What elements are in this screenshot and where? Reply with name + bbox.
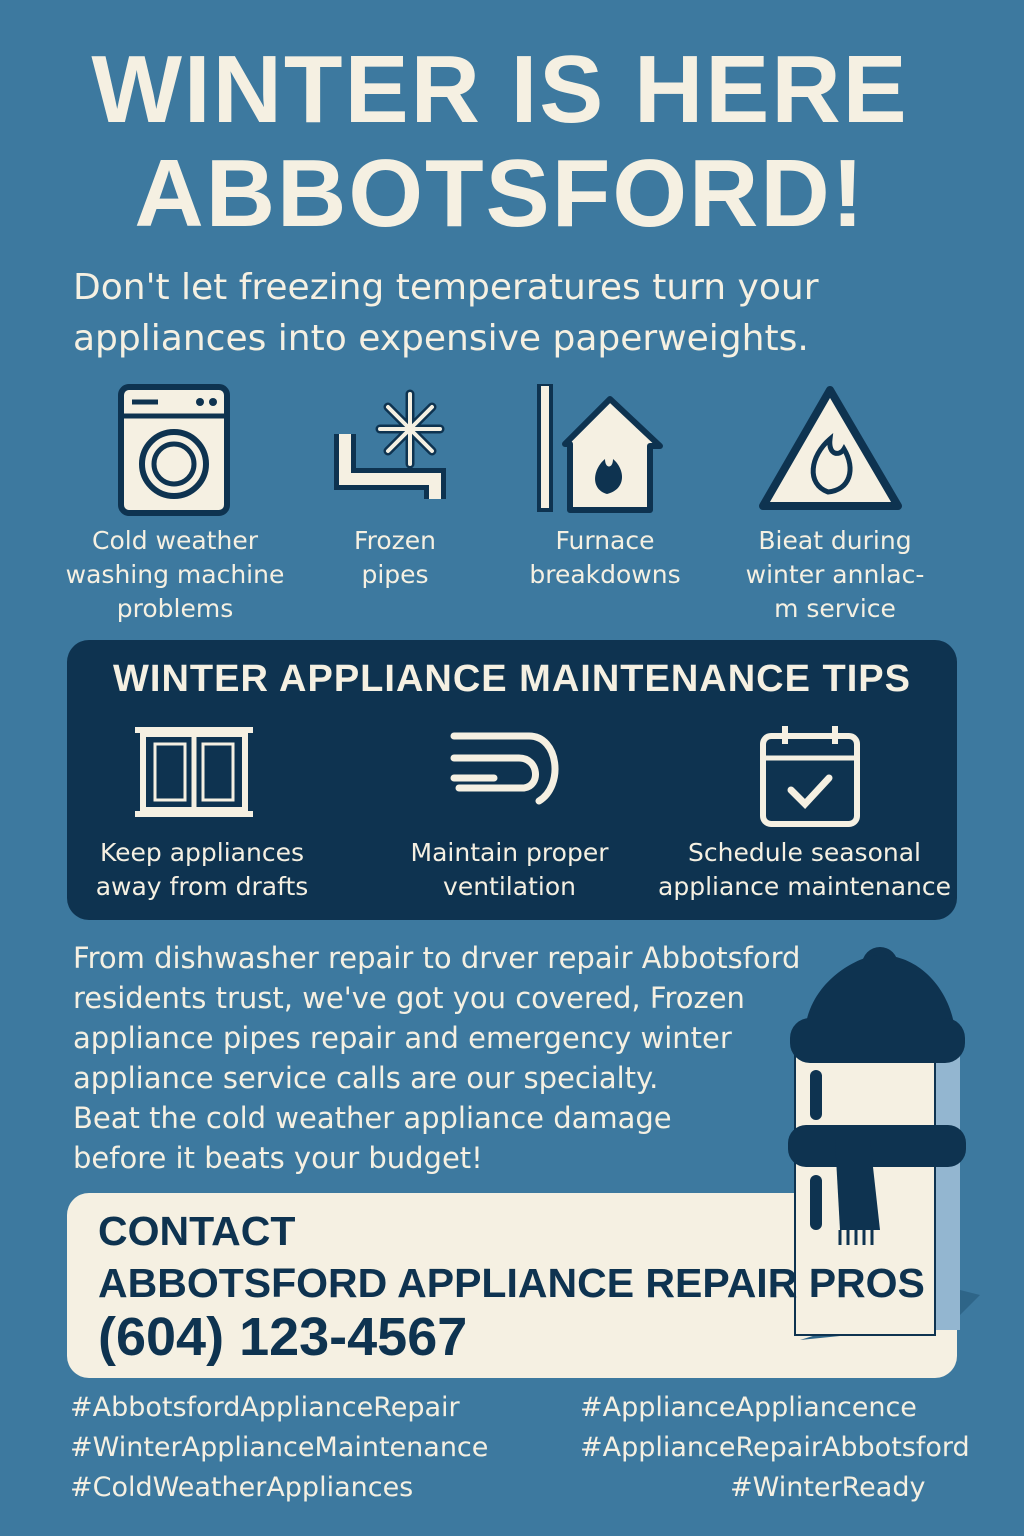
label: service: winter annlac- bbox=[746, 560, 924, 589]
label: washing machine: Cold weather washing machine problems bbox=[66, 526, 284, 623]
contact heading bbox=[98, 1208, 925, 1306]
title bbox=[91, 36, 909, 247]
label: service: Bieat during bbox=[758, 526, 912, 555]
hashtags left: #ColdWeatherAppliances bbox=[70, 1472, 413, 1503]
label: frozen pipes: pipes bbox=[361, 560, 429, 589]
contact heading: CONTACT bbox=[98, 1208, 295, 1254]
body text bbox=[73, 941, 800, 1175]
icon row bbox=[66, 384, 924, 623]
icon: house with fire bbox=[537, 384, 663, 513]
contact heading: ABBOTSFORD APPLIANCE REPAIR PROS bbox=[98, 1260, 925, 1306]
icon: washing machine bbox=[118, 384, 230, 516]
body text: residents trust, we've got you covered, Frozen bbox=[73, 981, 745, 1015]
label: furnace: Furnace breakdowns bbox=[529, 526, 681, 589]
fridge illustration bbox=[788, 947, 980, 1340]
hashtags right: #ApplianceAppliancence bbox=[580, 1392, 917, 1423]
hashtags left: #WinterApplianceMaintenance bbox=[70, 1432, 488, 1463]
label: schedule: Schedule seasonal appliance maintenance bbox=[658, 838, 951, 901]
icon: frozen pipe bbox=[334, 390, 446, 499]
hashtags right: #WinterReady bbox=[730, 1472, 925, 1503]
body text: appliance pipes repair and emergency winter bbox=[73, 1021, 732, 1055]
label: service bbox=[746, 526, 924, 623]
hashtags right: #ApplianceRepairAbbotsford bbox=[580, 1432, 970, 1463]
phone: (604) 123-4567 bbox=[98, 1307, 467, 1367]
body text: appliance service calls are our specialty. bbox=[73, 1061, 658, 1095]
body text: Beat the cold weather appliance damage bbox=[73, 1101, 672, 1135]
body text: before it beats your budget! bbox=[73, 1141, 483, 1175]
contact box bbox=[67, 1193, 957, 1378]
panel: maintenance tips bbox=[67, 640, 957, 920]
title: ABBOTSFORD! bbox=[134, 140, 866, 247]
heading: WINTER APPLIANCE MAINTENANCE TIPS bbox=[113, 658, 911, 700]
icon: ventilation bbox=[450, 732, 559, 804]
label: frozen pipes bbox=[354, 526, 436, 589]
hashtags left bbox=[70, 1392, 488, 1503]
label: frozen pipes: Frozen bbox=[354, 526, 436, 555]
label: ventilation: Maintain proper ventilation bbox=[411, 838, 608, 901]
label: service: m service bbox=[774, 594, 896, 623]
contact text bbox=[98, 1208, 925, 1367]
label: drafts: Keep appliances away from drafts bbox=[96, 838, 308, 901]
hashtags left: #AbbotsfordApplianceRepair bbox=[70, 1392, 460, 1423]
hashtags right bbox=[580, 1392, 970, 1503]
icon: window bbox=[135, 727, 253, 817]
icon: calendar bbox=[760, 726, 860, 827]
title: WINTER IS HERE bbox=[91, 36, 909, 143]
subtitle: Don't let freezing temperatures turn your appliances into expensive paperweights. bbox=[73, 267, 819, 359]
body text: From dishwasher repair to drver repair Abbotsford bbox=[73, 941, 800, 975]
icon: warning flame bbox=[759, 386, 902, 510]
